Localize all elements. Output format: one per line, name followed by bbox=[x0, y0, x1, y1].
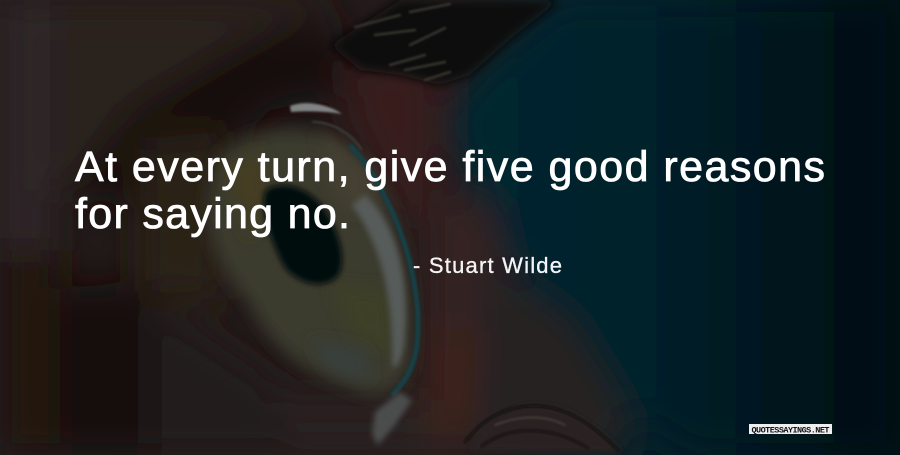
eye iris bbox=[208, 129, 412, 394]
quote text: for saying no. bbox=[75, 190, 350, 238]
eye pupil bbox=[264, 185, 342, 284]
corner highlight bbox=[372, 392, 412, 445]
iris warm tones bbox=[225, 150, 268, 240]
upper lid highlight bbox=[290, 103, 342, 114]
lower eyelashes bbox=[465, 405, 622, 452]
watermark: QUOTESSAYINGS.NET bbox=[752, 426, 830, 436]
quote text bbox=[75, 143, 825, 238]
quote text: At every turn, give five good reasons bbox=[75, 143, 825, 191]
lens rim, teal bbox=[350, 145, 418, 395]
author attribution: - Stuart Wilde bbox=[413, 253, 562, 278]
eye sclera highlight bbox=[352, 195, 406, 367]
upper eyelashes bbox=[330, 0, 560, 85]
